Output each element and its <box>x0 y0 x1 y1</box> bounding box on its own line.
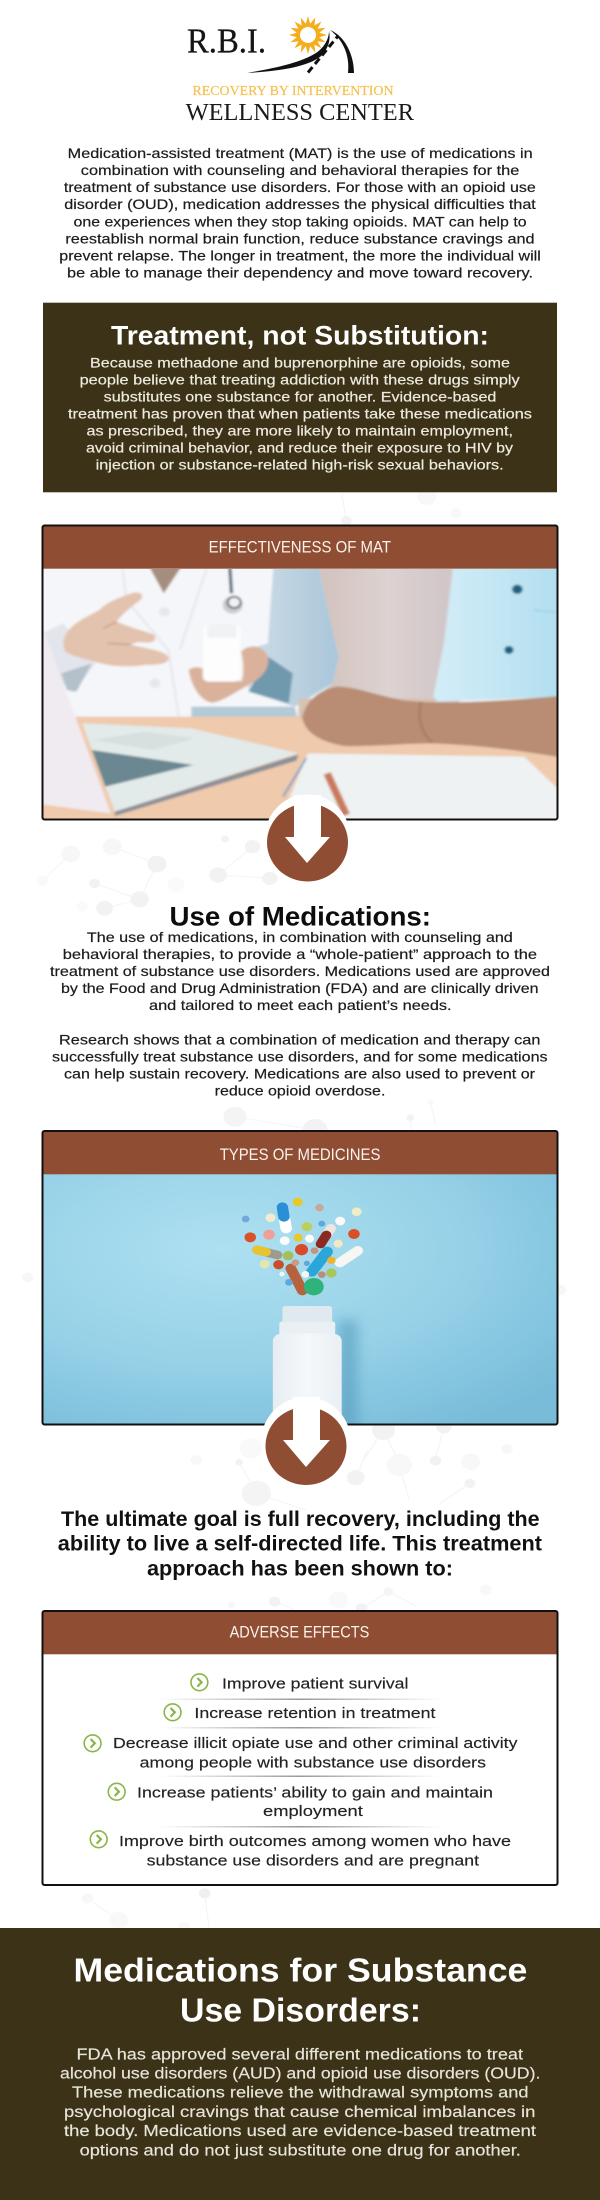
body text: FDA approved medications: FDA has approved several different medications to treat <box>76 2046 524 2063</box>
list item: gain and maintain employment: Increase patients’ ability to gain and maintain <box>137 1784 493 1801</box>
intro paragraph: disorder (OUD), medication addresses the physical difficulties that <box>64 196 536 212</box>
panel header: Adverse Effects: ADVERSE EFFECTS <box>230 1622 369 1641</box>
body text: use of medications <box>50 929 550 1099</box>
list item: improve patient survival: Improve patient survival <box>222 1675 408 1692</box>
icon: road <box>247 30 354 73</box>
body text: use of medications: reduce opioid overdose. <box>215 1083 385 1099</box>
heading: the ultimate goal: approach has been shown to: <box>147 1557 453 1580</box>
panel: Types of Medicines <box>42 1131 558 1430</box>
intro paragraph: one experiences when they stop taking opioids. MAT can help to <box>74 213 527 229</box>
body text: use of medications: behavioral therapies, to provide a “whole-patient” approach to the <box>63 946 537 962</box>
body text: FDA approved medications: These medications relieve the withdrawal symptoms and <box>72 2085 528 2102</box>
logo: R.B.I. Recovery by Intervention Wellness Center <box>186 16 414 126</box>
molecule background pattern <box>22 488 566 1933</box>
heading: Treatment, not Substitution: Treatment, not Substitution: <box>111 320 489 350</box>
panel header: Types of Medicines: TYPES OF MEDICINES <box>220 1145 380 1164</box>
panel header: Effectiveness of MAT: EFFECTIVENESS OF MAT <box>209 538 391 557</box>
body text: use of medications: by the Food and Drug Administration (FDA) and are clinically driven <box>61 980 538 996</box>
icon: sun <box>289 16 327 54</box>
body text: FDA approved medications: alcohol use disorders (AUD) and opioid use disorders (OUD). <box>60 2066 540 2082</box>
bottle <box>273 1306 342 1427</box>
intro paragraph: reestablish normal brain function, reduce substance cravings and <box>65 230 535 246</box>
list item: improve birth outcomes: substance use disorders and are pregnant <box>147 1852 480 1869</box>
intro paragraph <box>59 145 541 281</box>
list item: improve birth outcomes: Improve birth outcomes among women who have <box>119 1833 511 1850</box>
panel header: Types of Medicines <box>42 1131 558 1174</box>
body text: treatment not substitution: Because methadone and buprenorphine are opioids, some <box>90 354 510 370</box>
body text: use of medications: and tailored to meet each patient’s needs. <box>149 997 452 1013</box>
body text: use of medications: The use of medications, in combination with counseling and <box>87 929 513 945</box>
heading: the ultimate goal: The ultimate goal is full recovery, including the <box>61 1508 540 1531</box>
panel: Adverse Effects <box>42 1611 558 1885</box>
body text: FDA approved medications: the body. Medications used are evidence-based treatment <box>64 2123 537 2140</box>
pills <box>242 1198 362 1295</box>
list item: gain and maintain employment <box>108 1783 493 1820</box>
heading: Medications for Substance Use Disorders <box>74 1952 527 2029</box>
body text: use of medications: treatment of substance use disorders. Medications used are approved <box>50 963 550 979</box>
photo: pills spilling from a white bottle <box>43 1174 557 1430</box>
panel: Treatment, not Substitution <box>43 303 557 492</box>
intro paragraph: treatment of substance use disorders. For those with an opioid use <box>64 179 536 195</box>
body text: treatment not substitution <box>68 354 532 472</box>
arrow: down arrow after Types of Medicines <box>261 1397 351 1487</box>
panel header: Adverse Effects <box>42 1611 558 1654</box>
body text: use of medications: Research shows that a combination of medication and therapy can <box>59 1032 540 1048</box>
intro paragraph: Medication-assisted treatment (MAT) is the use of medications in <box>68 145 533 161</box>
heading: Medications for Substance Use Disorders: Medications for Substance <box>74 1952 527 1989</box>
intro paragraph: prevent relapse. The longer in treatment, the more the individual will <box>59 248 541 264</box>
body text: use of medications: can help sustain recovery. Medications are also used to prevent or <box>64 1066 535 1082</box>
list item: decrease illicit opiate use: among people with substance use disorders <box>140 1754 486 1771</box>
heading: Use of Medications: Use of Medications: <box>170 902 431 932</box>
logo name: WELLNESS CENTER <box>186 100 414 126</box>
body text: treatment not substitution: as prescribed, they are more likely to maintain employment, <box>86 422 513 438</box>
heading: Medications for Substance Use Disorders: Use Disorders: <box>180 1992 421 2029</box>
body text: treatment not substitution: people believe that treating addiction with these drugs simply <box>80 371 520 387</box>
body text: treatment not substitution: substitutes one substance for another. Evidence-based <box>104 388 496 404</box>
intro paragraph: be able to manage their dependency and move toward recovery. <box>67 265 533 281</box>
panel header: Effectiveness of MAT <box>42 526 558 569</box>
intro paragraph: combination with counseling and behavioral therapies for the <box>81 162 520 178</box>
body text: FDA approved medications <box>60 2046 540 2159</box>
list item: improve patient survival <box>191 1674 408 1692</box>
list item: decrease illicit opiate use <box>84 1735 518 1771</box>
arrow: down arrow after Effectiveness of MAT <box>265 794 350 882</box>
body text: treatment not substitution: injection or substance-related high-risk sexual behaviors. <box>96 456 504 472</box>
photo: doctor handing a pill bottle to a patient <box>34 563 566 827</box>
list item: increase retention: Increase retention in treatment <box>194 1705 436 1722</box>
heading: the ultimate goal <box>58 1508 542 1580</box>
body text: use of medications: successfully treat substance use disorders, and for some medications <box>52 1049 548 1065</box>
logo tagline: RECOVERY BY INTERVENTION <box>192 84 394 99</box>
logo text: R.B.I.: R.B.I. <box>187 22 266 61</box>
body text: treatment not substitution: treatment has proven that when patients take these medications <box>68 405 532 421</box>
body text: treatment not substitution: avoid criminal behavior, and reduce their exposure to HIV by <box>86 439 513 455</box>
list item: improve birth outcomes <box>90 1831 511 1869</box>
heading: the ultimate goal: ability to live a self-directed life. This treatment <box>58 1533 542 1556</box>
list item: gain and maintain employment: employment <box>263 1803 364 1820</box>
body text: FDA approved medications: options and do not just substitute one drug for another. <box>80 2142 521 2159</box>
body text: FDA approved medications: psychological cravings that cause chemical imbalances in <box>64 2104 535 2121</box>
panel: Effectiveness of MAT <box>34 526 566 827</box>
panel: Medications for Substance Use Disorders <box>0 1928 600 2200</box>
list item: decrease illicit opiate use: Decrease illicit opiate use and other criminal activity <box>113 1735 518 1752</box>
